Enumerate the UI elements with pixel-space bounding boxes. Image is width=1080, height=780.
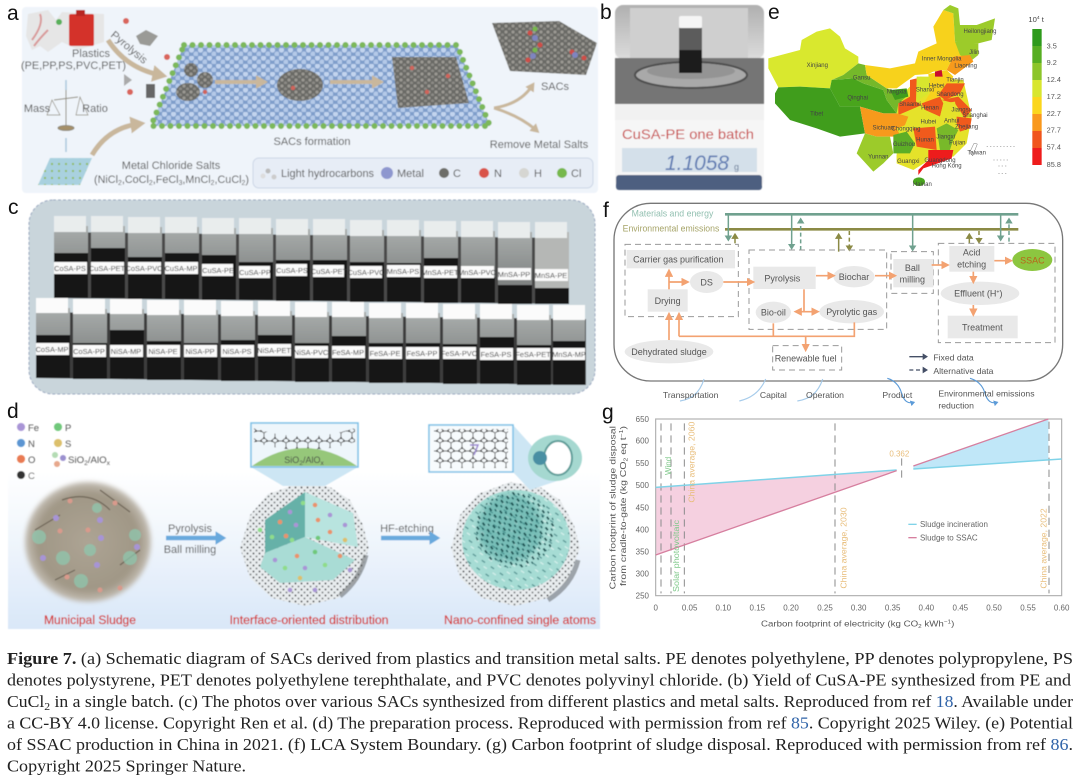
- balance control strip: [616, 175, 762, 190]
- province names: Zhejiang: [955, 125, 978, 131]
- province names: Shaanxi: [899, 102, 921, 108]
- axis titles: eq t: [618, 437, 628, 458]
- y axis ticks: 650: [636, 415, 650, 424]
- top row of vials: CuSA-PVC: [348, 268, 385, 277]
- province names: Guizhou: [893, 142, 915, 148]
- province names: Tibet: [810, 111, 824, 117]
- Taiwan and islands: [970, 143, 1017, 173]
- y axis ticks: 250: [636, 592, 650, 601]
- outer flow labels: reduction: [938, 400, 974, 410]
- figure caption: [7, 649, 1074, 776]
- sludge incineration line: [656, 459, 1062, 487]
- panel label e: e: [768, 1, 780, 24]
- sludge to SSAC line: [656, 419, 1048, 555]
- plastics label: Plastics: [72, 48, 110, 60]
- top row of vials: MnSA-PVC: [458, 268, 497, 277]
- process labels: SSAC: [1020, 255, 1045, 265]
- axis titles: Carbon footprint of electricity (kg CO: [761, 619, 901, 629]
- colour legend: 12.4: [1047, 75, 1061, 84]
- process labels: Biochar: [839, 272, 869, 282]
- bottom row of vials: CoSA-PP: [73, 347, 105, 356]
- top row of vials: MnSA-PS: [387, 267, 419, 276]
- nano-confined sphere: [451, 482, 580, 606]
- element legend: /AlO: [88, 455, 107, 466]
- panel d: preparation process: [8, 423, 600, 629]
- outer flow labels: [663, 388, 1035, 410]
- figure caption: a CC-BY 4.0 license. Copyright Ren et al. (d) The preparation process. Reproduced with permission from ref 85. Copyright 2025 Wiley. (e) Potential: [7, 714, 1073, 732]
- province names: Henan: [921, 105, 939, 111]
- element legend: [17, 423, 111, 482]
- interface inset: SiO: [284, 455, 299, 465]
- process labels: DS: [700, 277, 713, 287]
- metal chloride salts label: ,CuCl: [215, 174, 242, 186]
- metal chloride salts label: 2: [211, 180, 215, 187]
- bottom row of vials: CoSA-MP: [36, 345, 68, 354]
- y axis ticks: 400: [636, 525, 650, 534]
- process labels: Effluent (H: [954, 289, 996, 299]
- panel label c: c: [8, 196, 18, 219]
- materials and emissions bars: Environmental emissions: [623, 224, 720, 234]
- element legend: Fe: [28, 423, 39, 434]
- province names: Hainan: [913, 182, 932, 188]
- process labels: Treatment: [962, 322, 1003, 332]
- connecting flows: [728, 214, 1009, 252]
- balance display: 1.1058: [665, 152, 729, 175]
- province names: Guangxi: [897, 159, 919, 165]
- sludge caption: Municipal Sludge: [44, 615, 136, 627]
- dashed system groups: [625, 243, 1055, 370]
- y axis ticks: 300: [636, 570, 650, 579]
- element legend: SiO: [68, 455, 84, 466]
- x axis ticks: 0: [653, 604, 658, 613]
- shaded areas: [656, 419, 1048, 555]
- bottom row of vials: NiSA-PP: [185, 347, 215, 356]
- process labels: Carrier gas purification: [633, 255, 724, 265]
- top row of vials: CoSA-PVC: [126, 264, 163, 273]
- pyrolysis text: [164, 523, 216, 556]
- outer flow labels: Environmental emissions: [938, 388, 1035, 398]
- element legend: H: [534, 168, 542, 180]
- element legend: [253, 158, 593, 188]
- axis titles: Carbon footprint of sludge disposal: [607, 426, 617, 589]
- x axis ticks: 0.45: [953, 604, 969, 613]
- element legend: x: [107, 460, 111, 467]
- interface inset: [251, 423, 358, 467]
- bottom row of vials: FeSA-PS: [481, 350, 511, 359]
- cluster metal atoms: [203, 66, 450, 94]
- province names: Hubei: [921, 120, 936, 126]
- pyrolysis label: Pyrolysis: [108, 29, 150, 67]
- plastics feedstock icon: [26, 10, 104, 52]
- element legend: N: [28, 439, 35, 450]
- province names: [807, 29, 996, 188]
- colour legend: 3.5: [1047, 41, 1057, 50]
- data legend: [909, 353, 994, 376]
- bottom row of vials: FeSA-PP: [407, 349, 437, 358]
- colour legend: 17.2: [1047, 92, 1061, 101]
- top row of vials: MnSA-PET: [422, 268, 459, 277]
- magnified funnel: [251, 467, 358, 486]
- process labels: milling: [900, 274, 925, 284]
- top row of vials: CuSA-PP: [239, 268, 271, 277]
- element legend: Cl: [571, 168, 581, 180]
- metal chloride salts label: [94, 160, 249, 187]
- figure caption: of SSAC production in China in 2021. (f) LCA System Boundary. (g) Carbon footprint of sludge disposal. Reproduced with permission from ref 86.: [7, 735, 1073, 754]
- element legend: S: [65, 439, 71, 450]
- scenario labels: China average, 2060: [688, 421, 697, 503]
- mass and ratio labels: Ratio: [82, 103, 108, 115]
- colour legend: 57.4: [1047, 143, 1061, 152]
- interface inset: x: [320, 460, 324, 467]
- colour legend: 9.2: [1047, 58, 1057, 67]
- plot frame: [656, 419, 1062, 596]
- figure caption: Copyright 2025 Springer Nature.: [7, 756, 246, 776]
- colour legend: [1028, 15, 1061, 169]
- top row of vials: CuSA-PS: [276, 266, 308, 275]
- process labels: etching: [957, 260, 986, 270]
- formation arrow 1: [215, 80, 262, 84]
- chart legend: [908, 520, 988, 542]
- HF etching label: HF-etching: [380, 523, 434, 535]
- axis titles: −1: [619, 429, 625, 437]
- element legend: C: [453, 168, 461, 180]
- pyrolysis text: Pyrolysis: [168, 523, 212, 535]
- batch label: CuSA-PE one batch: [622, 126, 754, 142]
- element legend: O: [28, 455, 35, 466]
- x axis ticks: 0.20: [783, 604, 799, 613]
- province names: Jiangxi: [936, 135, 955, 141]
- bottom row of vials: FeSA-PVC: [441, 349, 478, 358]
- figure caption: denotes polystyrene, PET denotes polyethylene terephthalate, and PVC denotes polyvinyl chloride. (b) Yield of CuSA-PE synthesized from PE and: [7, 670, 1072, 690]
- y axis ticks: [636, 415, 650, 601]
- catalyst support lattice: [151, 45, 490, 126]
- bottom row of vials: NiSA-PET: [257, 346, 291, 355]
- bottom row of vials: FeSA-PET: [515, 350, 551, 359]
- colour legend: 4: [1037, 15, 1040, 21]
- province names: Taiwan: [967, 150, 986, 156]
- colour legend: t: [1040, 15, 1045, 24]
- panel label g: g: [602, 401, 614, 424]
- metal salt arrow: [92, 124, 138, 155]
- process labels: Dehydrated sludge: [631, 347, 707, 357]
- axis titles: 2: [918, 624, 922, 630]
- process labels: Drying: [655, 296, 681, 306]
- colour legend: 27.7: [1047, 126, 1061, 135]
- carbon growth clusters: [176, 57, 469, 108]
- process labels: Acid: [963, 248, 980, 258]
- process labels: [631, 248, 1045, 364]
- top row of vials: MnSA-PE: [535, 271, 567, 280]
- province names: Shanxi: [916, 87, 934, 93]
- mass ratio balance icon: [47, 84, 88, 130]
- axis titles: ): [951, 619, 954, 629]
- remove metal salts label: Remove Metal Salts: [490, 139, 589, 151]
- data legend: Alternative data: [933, 366, 994, 376]
- panel b: balance photo: [615, 5, 764, 190]
- y axis ticks: 350: [636, 547, 650, 556]
- province names: Jiangsu: [951, 107, 972, 113]
- province names: Heilongjiang: [964, 29, 996, 35]
- province names: Liaoning: [954, 64, 977, 70]
- scenario labels: 0.362: [889, 449, 910, 458]
- panel g: carbon footprint chart: [607, 415, 1070, 630]
- province names: Ningxia: [887, 90, 907, 96]
- materials and emissions bars: Materials and energy: [632, 209, 714, 219]
- sample vial: [679, 16, 702, 73]
- input and output curves: [680, 378, 997, 403]
- metal chloride salts label: ,FeCl: [153, 174, 179, 186]
- process labels: Bio-oil: [761, 308, 786, 318]
- panel label b: b: [600, 1, 612, 24]
- panel label f: f: [603, 199, 609, 222]
- province names: Hunan: [916, 137, 934, 143]
- colour legend: 10: [1028, 15, 1037, 24]
- province names: Shandong: [936, 92, 964, 98]
- top row of vials: [54, 216, 569, 304]
- x axis ticks: 0.10: [716, 604, 732, 613]
- SACs label: SACs: [541, 81, 570, 93]
- bottom row of vials: NiSA-PS: [222, 347, 252, 356]
- balance display: g: [734, 162, 739, 172]
- plastics label: [21, 48, 126, 72]
- outer flow labels: Operation: [806, 390, 844, 400]
- nano caption: Nano-confined single atoms: [444, 615, 596, 627]
- province names: Sichuan: [873, 126, 894, 132]
- panel label d: d: [7, 400, 19, 423]
- metal chloride salts label: ): [245, 174, 249, 186]
- process labels: Renewable fuel: [775, 354, 837, 364]
- axis titles: kWh: [922, 619, 944, 629]
- formation arrow 2: [330, 80, 378, 84]
- mass and ratio labels: [24, 103, 108, 115]
- figure caption: CuCl: [7, 692, 42, 711]
- y axis ticks: 450: [636, 503, 650, 512]
- SACs sheet product: [492, 21, 597, 75]
- x axis ticks: 0.50: [986, 604, 1002, 613]
- colour legend: 22.7: [1047, 109, 1061, 118]
- axis titles: from cradle-to-gate (kg CO: [618, 483, 628, 586]
- x axis ticks: 0.30: [851, 604, 867, 613]
- bottom row of vials: FeSA-PE: [370, 349, 400, 358]
- province names: Inner Mongolia: [922, 56, 962, 62]
- metal chloride salts label: 3: [179, 180, 183, 187]
- metal chloride salts label: 2: [242, 180, 245, 187]
- process labels: Ball: [905, 263, 920, 273]
- interface inset: 2: [299, 460, 303, 467]
- province names: Gansu: [853, 75, 870, 81]
- element legend: Metal: [397, 168, 424, 180]
- axis titles: ): [618, 426, 628, 429]
- scenario labels: China average, 2022: [1040, 508, 1049, 589]
- pyrolysis arrow: [108, 40, 160, 75]
- pyrolysis arrow: [166, 536, 220, 540]
- salt to balance arrows: [65, 80, 67, 152]
- process labels: Pyrolysis: [764, 274, 801, 284]
- interface inset: /AlO: [303, 455, 320, 465]
- HF etching arrow: [381, 536, 434, 540]
- carbon nanotube pore: [528, 435, 582, 481]
- branching output arrows: [494, 86, 536, 130]
- balance chamber: [615, 5, 764, 120]
- top row of vials: CuSA-PET: [89, 264, 126, 273]
- province names: Fujian: [949, 141, 965, 147]
- province names: Guangdong: [924, 158, 956, 164]
- outer flow labels: Transportation: [663, 390, 719, 400]
- element legend: 2: [84, 460, 88, 467]
- panel label a: a: [7, 2, 19, 25]
- process labels: Pyrolytic gas: [826, 307, 878, 317]
- y axis ticks: 500: [636, 481, 650, 490]
- top row of vials: CuSA-MP: [165, 264, 197, 273]
- panel f: LCA system boundary: [614, 203, 1063, 410]
- x axis ticks: 0.55: [1020, 604, 1036, 613]
- figure caption: 2: [44, 701, 50, 713]
- bottom row of vials: [36, 298, 586, 385]
- x axis ticks: [653, 604, 1070, 613]
- data legend: Fixed data: [933, 353, 974, 363]
- province names: Anhui: [944, 119, 959, 125]
- axis titles: −1: [944, 620, 951, 626]
- metal chloride salts label: ,MnCl: [182, 174, 211, 186]
- scenario labels: China average, 2030: [839, 507, 848, 589]
- pyrolysis text: Ball milling: [164, 544, 216, 556]
- x axis ticks: 0.40: [919, 604, 935, 613]
- reference lines: [661, 422, 1049, 593]
- floating hydrocarbon molecules: [123, 18, 170, 98]
- province names: Yunnan: [868, 155, 888, 161]
- province names: Tianjin: [946, 77, 964, 83]
- x axis ticks: 0.35: [885, 604, 901, 613]
- bottom row of vials: MnSA-MP: [552, 350, 586, 359]
- y axis ticks: 600: [636, 437, 650, 446]
- interface sphere: [240, 483, 369, 606]
- figure caption: in a single batch. (c) The photos over various SACs synthesized from different plastics and metal salts. Reproduced from ref: [50, 692, 936, 711]
- metal chloride salts label: 2: [149, 180, 153, 187]
- SACs formation label: SACs formation: [273, 136, 351, 148]
- scenario labels: Wind: [664, 457, 673, 475]
- process flow arrows: [669, 261, 1011, 350]
- panel c: photo of vials: [29, 200, 595, 394]
- process labels: +: [996, 290, 1000, 296]
- province names: Shanghai: [962, 113, 988, 119]
- top row of vials: CoSA-PS: [54, 264, 86, 273]
- plastics label: (PE,PP,PS,PVC,PET): [21, 60, 126, 72]
- metal chloride salts label: ,CoCl: [122, 174, 149, 186]
- axis titles: [607, 426, 954, 630]
- figure caption: 18. Available under: [936, 692, 1065, 711]
- colour legend: 85.8: [1047, 160, 1061, 169]
- axis titles: 2: [623, 458, 629, 461]
- chart legend: Sludge to SSAC: [920, 533, 978, 542]
- provinces: [768, 5, 995, 186]
- graphene inset: [429, 425, 560, 490]
- metal chloride salts label: 2: [118, 180, 122, 187]
- balance display: [622, 148, 757, 175]
- process boxes: [625, 246, 1052, 363]
- outer flow labels: Capital: [760, 390, 787, 400]
- process labels: ): [1000, 289, 1003, 299]
- scenario labels: Solar photovoltaic: [672, 520, 681, 592]
- municipal sludge sphere: [25, 482, 151, 602]
- y axis ticks: 550: [636, 459, 650, 468]
- x axis ticks: 0.60: [1054, 604, 1070, 613]
- x axis ticks: 0.05: [682, 604, 698, 613]
- province names: Jilin: [969, 50, 979, 56]
- bottom row of vials: NiSA-PVC: [294, 348, 329, 357]
- bottom row of vials: NiSA-PE: [148, 347, 178, 356]
- materials and emissions bars: [623, 209, 1018, 234]
- province names: Chongqing: [892, 126, 920, 132]
- figure caption: Figure 7. (a) Schematic diagram of SACs derived from plastics and transition metal salts. PE denotes polyethylene, PP denotes polypropylene, PS: [7, 649, 1073, 668]
- outer flow labels: Product: [882, 390, 913, 400]
- element legend: Light hydrocarbons: [281, 168, 374, 180]
- mass and ratio labels: Mass: [24, 103, 51, 115]
- metal chloride salts label: (NiCl: [94, 174, 118, 186]
- element legend: N: [494, 168, 502, 180]
- x axis ticks: 0.25: [817, 604, 833, 613]
- metal salt lattice: [38, 158, 92, 185]
- province names: Xinjiang: [807, 63, 828, 69]
- chart legend: Sludge incineration: [920, 520, 988, 529]
- element legend: P: [65, 423, 71, 434]
- interface caption: Interface-oriented distribution: [230, 615, 388, 627]
- element legend: C: [28, 471, 35, 482]
- province names: Hong Kong: [932, 164, 962, 170]
- bottom row of vials: NiSA-MP: [111, 347, 141, 356]
- province names: Qinghai: [847, 96, 868, 102]
- bottom row of vials: FeSA-MP: [332, 348, 364, 357]
- top row of vials: CuSA-PET: [311, 267, 348, 276]
- metal chloride salts label: Metal Chloride Salts: [122, 160, 221, 172]
- panel a: SAC synthesis schematic: [21, 7, 598, 193]
- top row of vials: MnSA-PP: [498, 270, 530, 279]
- scenario labels: [664, 421, 1049, 592]
- panel e: China production map: [768, 5, 1061, 188]
- x axis ticks: 0.15: [750, 604, 766, 613]
- province names: Hebei: [929, 83, 944, 89]
- top row of vials: CuSA-PE: [202, 266, 234, 275]
